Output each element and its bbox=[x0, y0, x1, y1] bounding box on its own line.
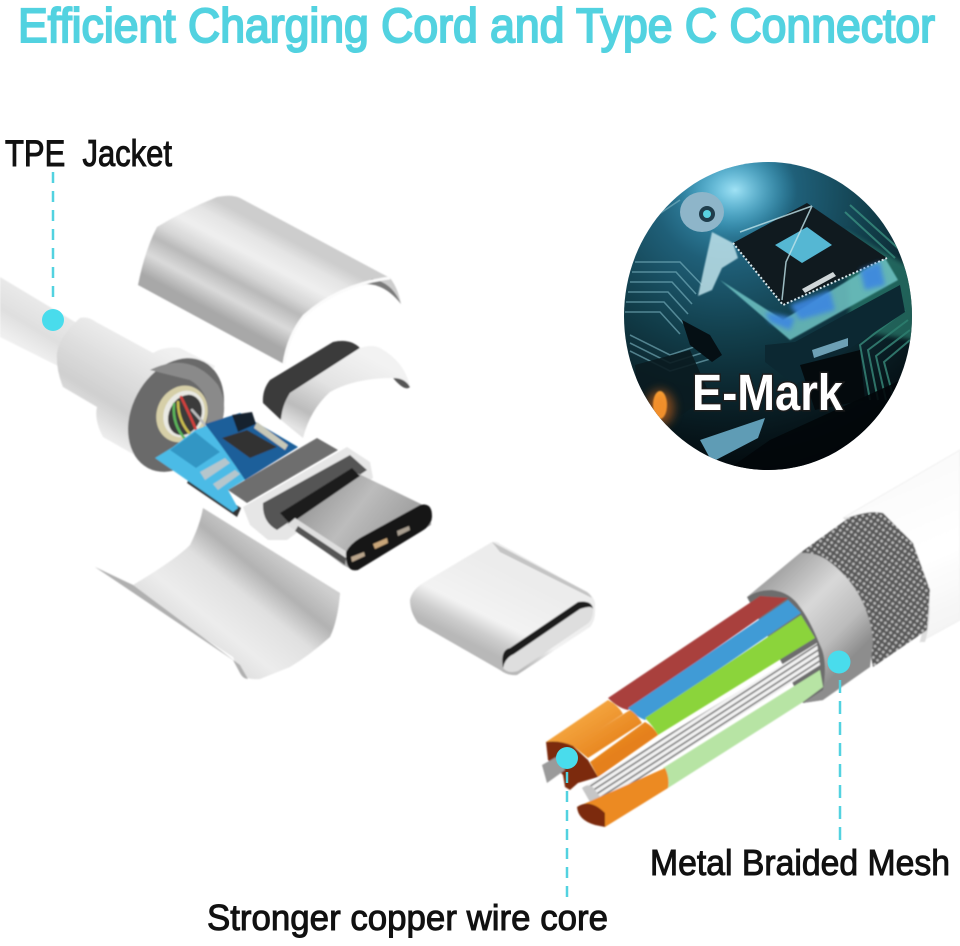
black bottom bbox=[734, 381, 898, 470]
orange LED bbox=[653, 391, 667, 419]
pale green wire bbox=[663, 670, 823, 788]
metal C cap bbox=[410, 542, 595, 675]
strain relief boot bbox=[57, 318, 215, 462]
leader line: copper wire core bbox=[566, 772, 568, 905]
silver band bbox=[747, 553, 873, 703]
exploded connector illustration bbox=[0, 196, 595, 679]
blue heat glow bbox=[765, 262, 885, 330]
IC chip bbox=[222, 430, 277, 458]
metal braided mesh bbox=[800, 512, 930, 667]
collar face bbox=[109, 341, 243, 489]
connector rear plate bbox=[228, 438, 338, 503]
dark interior of sleeve bbox=[747, 565, 830, 703]
plug opening bbox=[346, 504, 432, 570]
left circuit traces bbox=[625, 192, 710, 371]
contact pins bbox=[351, 552, 365, 562]
label: TPE Jacket: TPE Jacket bbox=[5, 133, 173, 174]
robot bbox=[680, 192, 724, 232]
blue wire bbox=[628, 600, 801, 720]
connector metal frame bbox=[243, 447, 373, 540]
green wire bbox=[645, 615, 815, 735]
marker: copper wire core bbox=[556, 747, 578, 769]
right circuit traces bbox=[845, 205, 910, 400]
coloured inner wires bbox=[174, 397, 208, 440]
small metal shell bbox=[263, 341, 410, 438]
red wire bbox=[608, 596, 788, 710]
marker: TPE Jacket bbox=[42, 309, 64, 331]
marker: Metal Braided Mesh bbox=[828, 650, 850, 674]
connector dark band bbox=[263, 455, 367, 530]
blue light flare bbox=[682, 162, 790, 232]
crystal parts bbox=[812, 338, 848, 358]
circuit board bbox=[155, 412, 298, 517]
white cord bbox=[0, 277, 80, 366]
white outer cable bbox=[843, 450, 960, 642]
cable cross-section bbox=[542, 450, 960, 827]
copper strand tip bbox=[542, 756, 565, 783]
USB-C plug bbox=[280, 468, 432, 570]
crystal component bbox=[254, 422, 288, 450]
dark copper ends bbox=[546, 742, 598, 790]
circuit board slab bbox=[720, 258, 898, 340]
processor chip bbox=[733, 203, 887, 305]
green board glow bbox=[845, 230, 915, 340]
orange wires bbox=[546, 700, 623, 747]
leader line: Metal Braided Mesh bbox=[839, 680, 841, 848]
E-Mark disc bbox=[624, 142, 915, 475]
label: Stronger copper wire core: Stronger copper wire core bbox=[207, 897, 608, 938]
silver stranded wire bbox=[583, 643, 820, 803]
dark capacitor blocks bbox=[682, 320, 722, 362]
top metal shell bbox=[138, 196, 401, 364]
leader line: TPE Jacket bbox=[52, 172, 54, 305]
bottom metal shell bbox=[95, 508, 340, 679]
E-Mark label: E-Mark bbox=[692, 364, 844, 421]
